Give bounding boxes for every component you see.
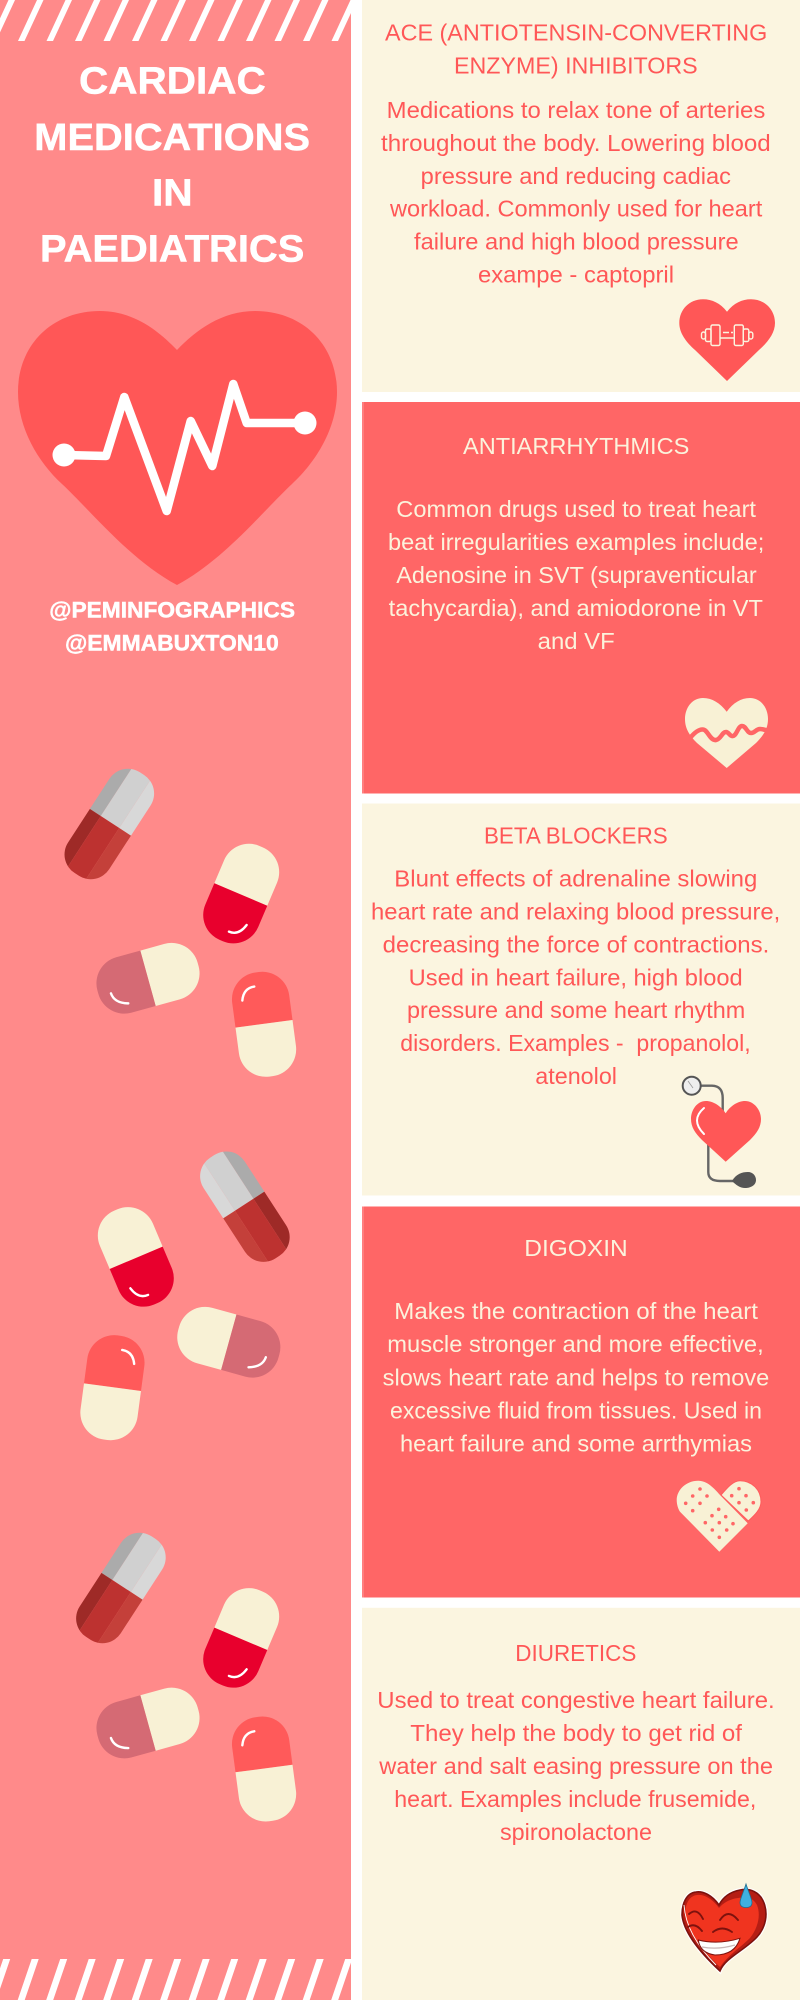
body text: Beta blockers: Blunt effects of adrenaline slowing xyxy=(394,866,757,892)
body text: ACE inhibitors: failure and high blood pressure xyxy=(414,229,739,255)
icon: plaster heart xyxy=(677,1481,761,1552)
title xyxy=(34,61,310,270)
panel: Antiarrhythmics xyxy=(362,402,800,794)
body text: Antiarrhythmics: Common drugs used to treat heart xyxy=(396,496,757,522)
body text: Digoxin: heart failure and some arrthymias xyxy=(400,1430,752,1456)
icon: smiling sweating heart xyxy=(682,1884,766,1971)
body text: Beta blockers: atenolol xyxy=(535,1063,617,1089)
body text: Beta blockers xyxy=(371,866,780,1089)
body text: Antiarrhythmics: Adenosine in SVT (supraventicular xyxy=(396,562,757,588)
body text: Diuretics: water and salt easing pressure on the xyxy=(378,1753,773,1779)
body text: Beta blockers: heart rate and relaxing blood pressure, xyxy=(371,899,780,925)
top stripes xyxy=(0,0,357,41)
body text: ACE inhibitors: Medications to relax tone of arteries xyxy=(387,97,765,123)
panel: Diuretics xyxy=(362,1608,800,2000)
body text: ACE inhibitors xyxy=(381,97,771,288)
bottom stripes xyxy=(0,1959,352,2000)
heading: Beta blockers: BETA BLOCKERS xyxy=(484,823,668,849)
body text: ACE inhibitors: pressure and reducing cadiac xyxy=(421,163,731,189)
body text: Beta blockers: decreasing the force of contractions. xyxy=(383,932,769,958)
title: PAEDIATRICS xyxy=(40,228,304,270)
body text: Diuretics xyxy=(377,1687,775,1845)
body text: Diuretics: They help the body to get rid of xyxy=(410,1720,743,1746)
body text: Antiarrhythmics: tachycardia), and amiodorone in VT xyxy=(389,595,763,621)
icon: heart with blood pressure cuff xyxy=(683,1077,761,1188)
body text: Diuretics: heart. Examples include frusemide, xyxy=(394,1786,756,1812)
title: MEDICATIONS xyxy=(34,117,310,159)
social handles: @PEMINFOGRAPHICS xyxy=(49,598,295,622)
heading: ACE inhibitors: ENZYME) INHIBITORS xyxy=(454,52,698,78)
body text: Digoxin: excessive fluid from tissues. Used in xyxy=(390,1397,762,1423)
body text: Digoxin xyxy=(383,1298,769,1456)
icon: big heart with ECG trace xyxy=(18,311,337,585)
heading: Antiarrhythmics: ANTIARRHYTHMICS xyxy=(463,433,689,459)
panel: Digoxin xyxy=(362,1206,800,1598)
heading: Diuretics: DIURETICS xyxy=(515,1640,636,1666)
body text: ACE inhibitors: workload. Commonly used for heart xyxy=(389,196,763,222)
body text: Beta blockers: pressure and some heart rhythm xyxy=(407,997,745,1023)
body text: Beta blockers: Used in heart failure, high blood xyxy=(409,964,743,990)
body text: Digoxin: slows heart rate and helps to remove xyxy=(383,1364,769,1390)
body text: Beta blockers: disorders. Examples - propanolol, xyxy=(400,1030,751,1056)
heading: ACE inhibitors: ACE (ANTIOTENSIN-CONVERTING xyxy=(385,20,767,46)
body text: ACE inhibitors: exampe - captopril xyxy=(478,262,674,288)
left panel xyxy=(0,0,357,2000)
body text: Diuretics: Used to treat congestive heart failure. xyxy=(377,1687,775,1713)
panel: ACE inhibitors xyxy=(362,0,800,392)
social handles xyxy=(49,598,295,656)
body text: Digoxin: Makes the contraction of the heart xyxy=(394,1298,759,1324)
pill cluster 2 xyxy=(77,1141,300,1444)
body text: Digoxin: muscle stronger and more effective, xyxy=(387,1331,764,1357)
pill cluster 1 xyxy=(55,758,300,1080)
icon: heart with dumbbell xyxy=(679,299,775,381)
body text: Antiarrhythmics: beat irregularities examples include; xyxy=(388,529,764,555)
heading: ACE inhibitors xyxy=(385,20,767,78)
social handles: @EMMABUXTON10 xyxy=(65,630,279,656)
pill cluster 3 xyxy=(66,1522,300,1825)
title: CARDIAC xyxy=(79,61,266,103)
body text: Diuretics: spironolactone xyxy=(500,1819,652,1845)
panel: Beta blockers xyxy=(362,804,800,1196)
body text: Antiarrhythmics: and VF xyxy=(538,628,615,654)
title: IN xyxy=(152,172,193,214)
icon: heart with wave xyxy=(685,698,769,768)
body text: Antiarrhythmics xyxy=(388,496,764,654)
body text: ACE inhibitors: throughout the body. Lowering blood xyxy=(381,130,771,156)
heading: Digoxin: DIGOXIN xyxy=(524,1235,628,1261)
